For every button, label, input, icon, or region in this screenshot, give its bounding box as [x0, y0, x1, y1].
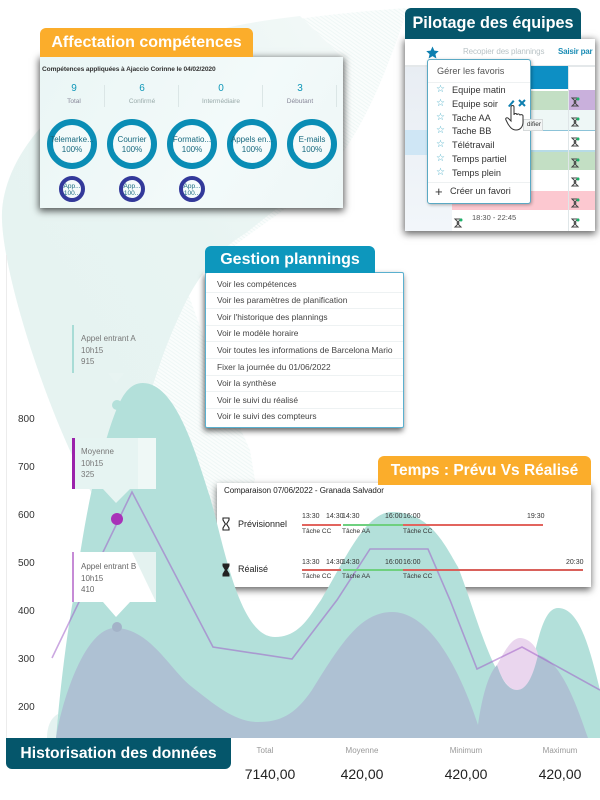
time label: 18:30 - 22:45	[472, 213, 516, 222]
icon: edit and delete	[508, 99, 526, 107]
heading: gestion plannings: Gestion plannings	[220, 251, 360, 268]
favourites list: ☆	[436, 139, 445, 150]
panel: affectation compétences: 100...	[184, 190, 200, 196]
y axis labels: 200	[18, 702, 35, 713]
favourites list: Equipe matin	[452, 85, 506, 95]
menu list: Voir les paramètres de planification	[217, 295, 347, 305]
favourites list: Tache AA	[452, 113, 491, 123]
stats: moyenne	[340, 746, 383, 782]
panel: affectation compétences: App...	[184, 182, 200, 190]
counters: Confirmé	[129, 98, 155, 105]
stats: total: Total	[257, 746, 273, 755]
timeline: prévisionnel: 14:30	[326, 513, 344, 520]
favourites list: Temps partiel	[452, 154, 507, 164]
stats: minimum: 420,00	[445, 766, 487, 782]
menu list: Voir toutes les informations de Barcelona Mario	[217, 345, 392, 355]
favourites list	[436, 84, 507, 178]
icon: hand cursor	[505, 105, 524, 130]
heading: historisation des données: Historisation des données	[20, 745, 217, 762]
vertical axis line	[6, 255, 7, 738]
menu list: Voir les compétences	[217, 278, 297, 288]
panel: affectation compétences: Telemarke...	[50, 135, 94, 144]
timeline: prévisionnel: Tâche CC	[403, 528, 432, 535]
temps panel content	[222, 486, 584, 580]
timeline: prévisionnel: 13:30	[302, 513, 320, 520]
y axis labels: 600	[18, 510, 35, 521]
timeline: réalisé: 16:00	[403, 559, 421, 566]
panel: affectation compétences: 100%	[62, 144, 82, 154]
skill ring: e-mails	[287, 119, 337, 169]
menu list: Voir le suivi du réalisé	[217, 395, 298, 405]
panel: affectation compétences: App...	[124, 182, 140, 190]
heading: affectation compétences	[40, 28, 253, 57]
timeline: réalisé: Tâche CC	[302, 573, 331, 580]
stats: maximum	[538, 746, 581, 782]
panel: affectation compétences: 100%	[122, 144, 142, 154]
favourites list: Télétravail	[452, 140, 494, 150]
skill ring: appels entrants	[227, 119, 277, 169]
heading: pilotage des équipes	[405, 8, 581, 39]
menu list: Voir l'historique des plannings	[217, 312, 328, 322]
panel: affectation compétences: E-mails	[299, 135, 325, 144]
favourites list: Temps plein	[452, 168, 501, 178]
skill ring: courrier	[107, 119, 157, 169]
favourites list: Equipe soir	[452, 99, 498, 109]
counters: 9	[71, 83, 77, 94]
tooltip: appel entrant A: 915	[81, 357, 94, 366]
stats: minimum: Minimum	[450, 746, 482, 755]
menu list	[206, 278, 403, 421]
small ring 1	[59, 176, 85, 202]
counters: 6	[139, 83, 145, 94]
panel: pilotage des équipes	[405, 39, 595, 231]
icon: hourglass outline	[222, 518, 230, 530]
panel: gestion plannings	[205, 272, 404, 428]
skill ring: telemarketing	[47, 119, 97, 169]
icon: hourglass filled	[222, 564, 230, 576]
tooltip: modifier	[523, 119, 543, 131]
timeline: réalisé: Tâche AA	[342, 573, 370, 580]
series: blue-grey area	[56, 612, 588, 738]
heading: temps prévu vs réalisé: Temps : Prévu Vs Réalisé	[391, 462, 578, 479]
timeline: prévisionnel: 14:30	[342, 513, 360, 520]
panel: affectation compétences: 100%	[242, 144, 262, 154]
favourites list: ☆	[436, 84, 445, 95]
timeline: prévisionnel	[302, 513, 545, 535]
timeline: réalisé	[302, 559, 584, 580]
stats: total	[245, 746, 295, 782]
favourites list: ☆	[436, 125, 445, 136]
heading: pilotage des équipes: Pilotage des équipes	[412, 14, 574, 32]
panel: temps prévu vs réalisé	[217, 483, 591, 587]
left column	[405, 66, 452, 231]
stats: maximum: 420,00	[539, 766, 581, 782]
label: réalisé: Réalisé	[238, 564, 268, 574]
menu list: Voir la synthèse	[217, 378, 276, 388]
tooltip: moyenne: 325	[81, 470, 94, 479]
label: prévisionnel: Prévisionnel	[238, 519, 287, 529]
timeline: réalisé: 16:00	[385, 559, 403, 566]
series: pink area	[497, 638, 538, 690]
small ring 2	[119, 176, 145, 202]
stats: maximum: Maximum	[543, 746, 577, 755]
tooltip: moyenne: 10h15	[81, 458, 103, 468]
panel: affectation compétences: 100%	[182, 144, 202, 154]
stats: total: 7140,00	[245, 766, 295, 782]
timeline: prévisionnel: Tâche AA	[342, 528, 370, 535]
counters: Intermédiaire	[202, 98, 240, 105]
timeline: réalisé: 13:30	[302, 559, 320, 566]
small ring 3	[179, 176, 205, 202]
y axis labels: 500	[18, 558, 35, 569]
tooltip: appel entrant A: Appel entrant A	[81, 334, 136, 343]
stats: minimum	[444, 746, 487, 782]
timeline: réalisé: 14:30	[342, 559, 360, 566]
favourites list: ☆	[436, 98, 445, 109]
counters: 0	[218, 83, 224, 94]
row colours	[452, 91, 568, 110]
y axis labels: 800	[18, 414, 35, 425]
favourites list: Tache BB	[452, 126, 491, 136]
tooltip: appel entrant A	[72, 325, 136, 373]
timeline: prévisionnel: Tâche CC	[302, 528, 331, 535]
heading: gestion plannings	[205, 246, 375, 273]
y axis labels	[18, 414, 35, 713]
tooltip: moyenne: Moyenne	[81, 447, 114, 456]
tooltip: moyenne	[72, 438, 156, 503]
timeline: prévisionnel: 16:00	[403, 513, 421, 520]
tooltip: appel entrant B	[72, 552, 156, 617]
timeline: prévisionnel: 16:00	[385, 513, 403, 520]
counters	[67, 83, 314, 105]
create favourite: Créer un favori	[450, 186, 511, 196]
panel: affectation compétences: 100...	[64, 190, 80, 196]
skill ring: formation	[167, 119, 217, 169]
stats: moyenne: 420,00	[341, 766, 383, 782]
tooltip: appel entrant B: Appel entrant B	[81, 562, 136, 571]
timeline: réalisé: 14:30	[326, 559, 344, 566]
panel: affectation compétences: 100%	[302, 144, 322, 154]
comparison title: Comparaison 07/06/2022 - Granada Salvador	[224, 486, 384, 495]
favourites list: ☆	[436, 112, 445, 123]
hourglass icons	[454, 98, 580, 228]
counters: Débutant	[287, 98, 313, 105]
timeline: réalisé: 20:30	[566, 559, 584, 566]
counters: Total	[67, 98, 81, 105]
tooltip: appel entrant B: 410	[81, 585, 94, 594]
heading: affectation compétences: Affectation compétences	[51, 34, 242, 51]
favourites list: ☆	[436, 153, 445, 164]
create favourite	[435, 184, 511, 199]
header band	[405, 65, 595, 67]
panel: affectation compétences: Courrier	[118, 135, 146, 144]
favourites popup	[427, 59, 531, 204]
y axis labels: 300	[18, 654, 35, 665]
menu list: Voir le suivi des compteurs	[217, 411, 317, 421]
series: teal area	[56, 383, 600, 738]
tooltip: modifier: difier	[527, 121, 541, 128]
timeline: prévisionnel: 19:30	[527, 513, 545, 520]
toolbar: Recopier des plannings	[463, 47, 544, 56]
blue column header	[452, 66, 568, 89]
panel: affectation compétences: 100...	[124, 190, 140, 196]
panel: affectation compétences	[40, 57, 343, 208]
series: average line	[52, 492, 600, 690]
panel: affectation compétences: App...	[64, 182, 80, 190]
tooltip: appel entrant B: 10h15	[81, 574, 103, 582]
create favourite: +	[435, 184, 443, 199]
icon: favourite star	[426, 46, 439, 58]
menu list: Fixer la journée du 01/06/2022	[217, 362, 331, 372]
y axis labels: 400	[18, 606, 35, 617]
counters: 3	[297, 83, 303, 94]
panel: affectation compétences: Appels en...	[231, 135, 273, 144]
y axis labels: 700	[18, 462, 35, 473]
tooltip: appel entrant A: 10h15	[81, 346, 103, 354]
panel title: Compétences appliquées à Ajaccio Corinne le 04/02/2020	[42, 66, 216, 73]
stats: moyenne: Moyenne	[346, 746, 378, 755]
heading: historisation des données	[6, 738, 231, 769]
menu list: Voir le modèle horaire	[217, 328, 298, 338]
timeline: réalisé: Tâche CC	[403, 573, 432, 580]
favourites list: ☆	[436, 167, 445, 178]
popup heading: Gérer les favoris	[437, 66, 504, 76]
panel: affectation compétences: Formatio...	[173, 135, 211, 144]
heading: temps prévu vs réalisé	[378, 456, 591, 485]
